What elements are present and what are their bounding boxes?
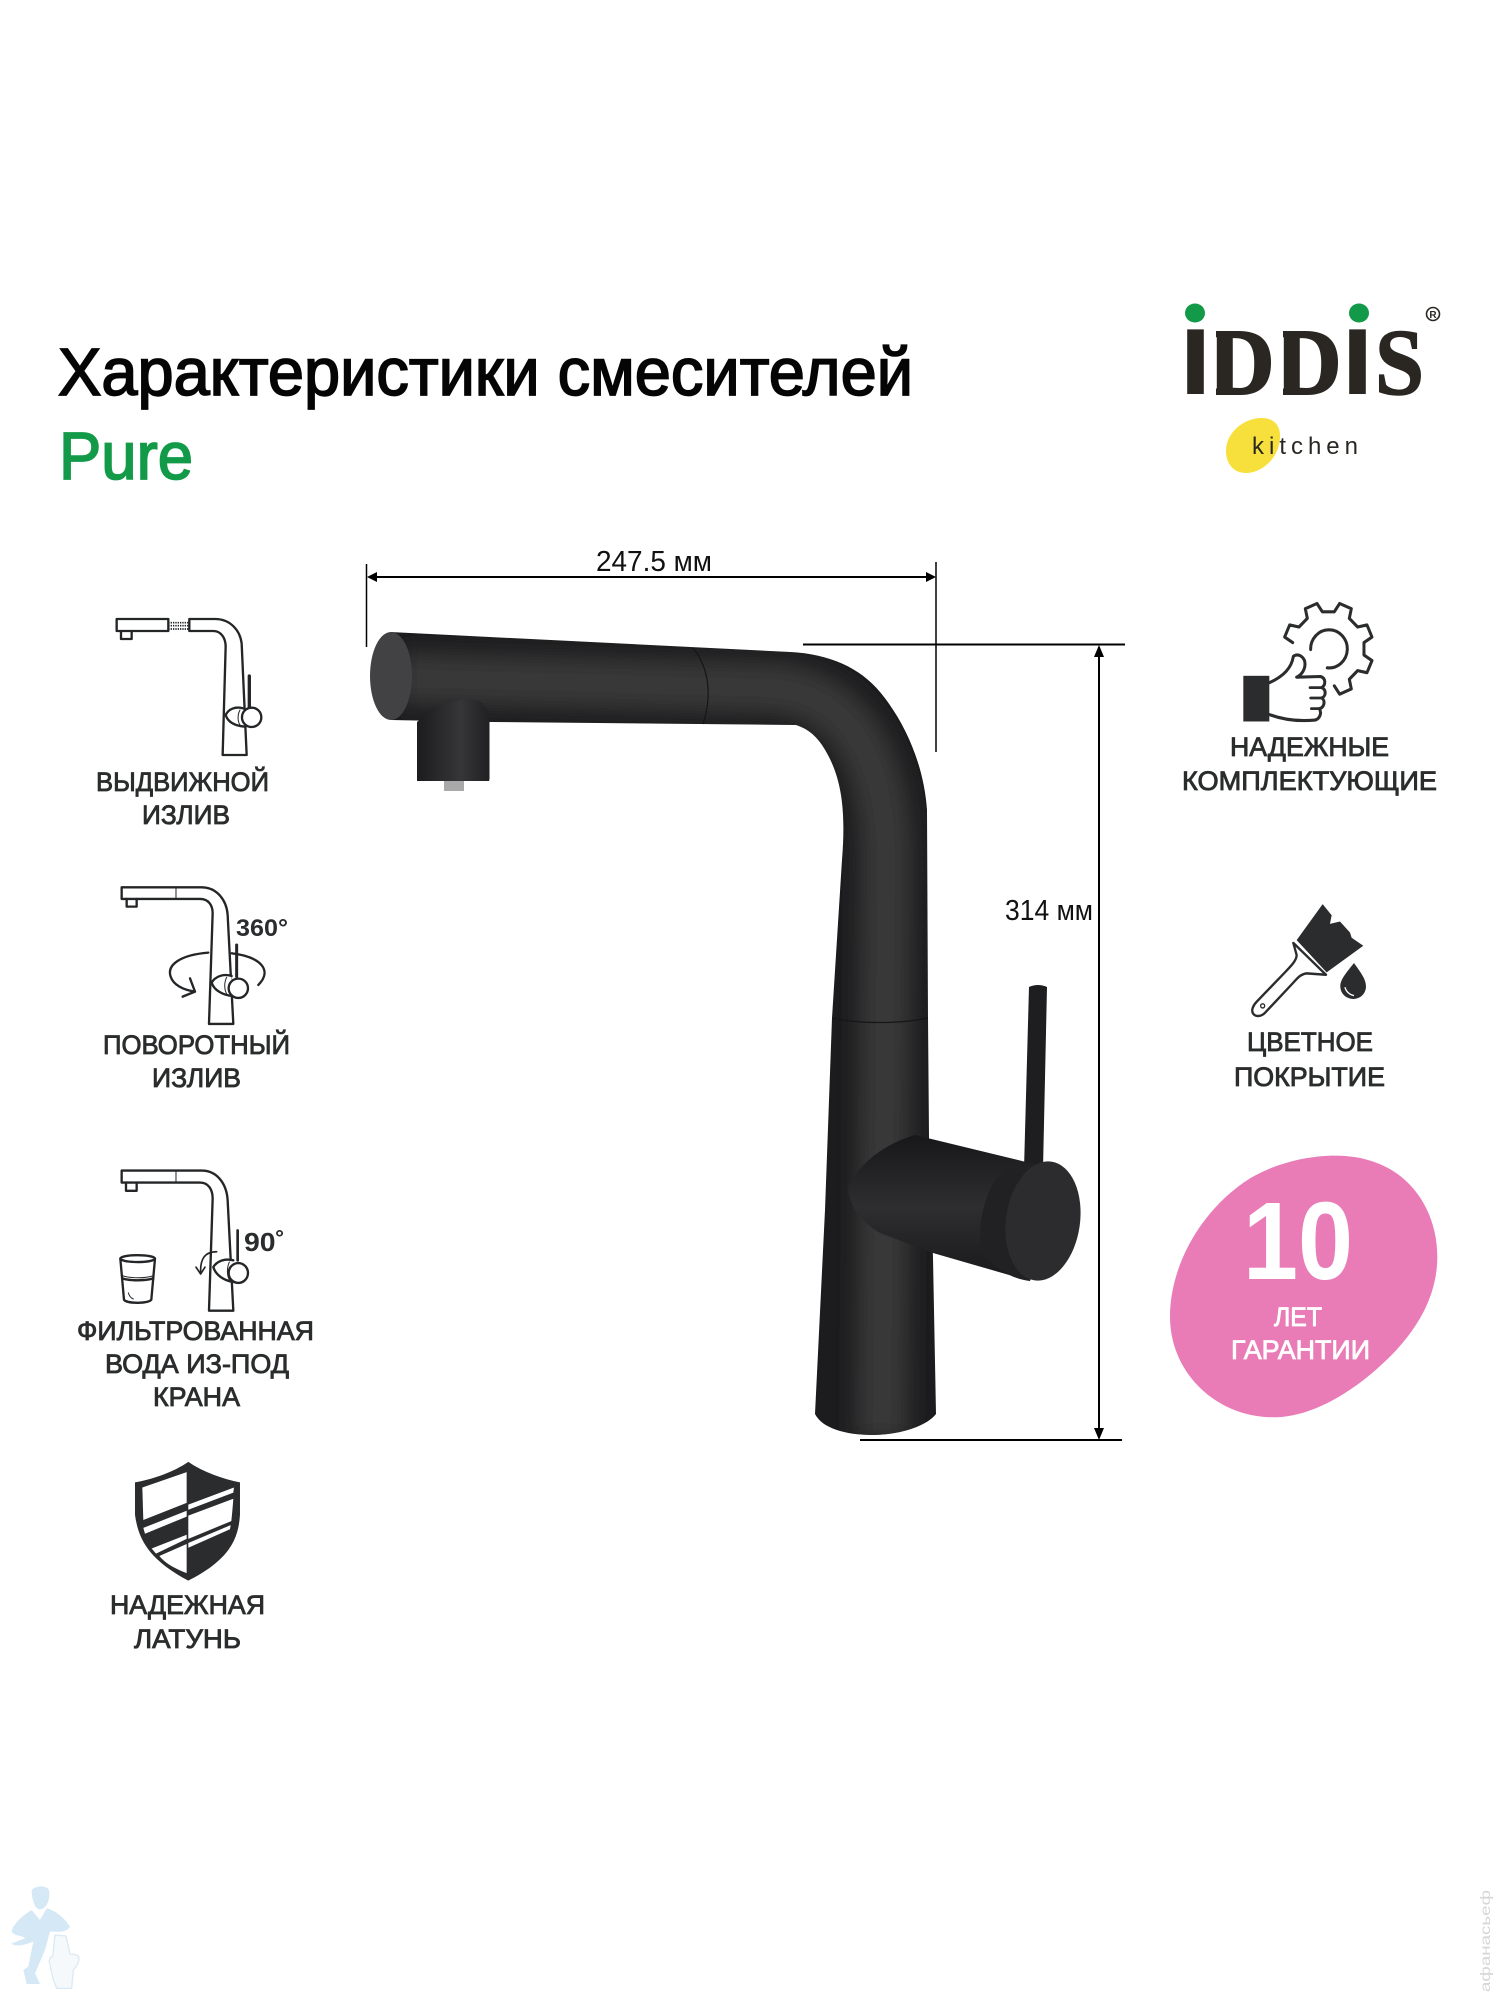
left feature: brass [110,1462,265,1654]
warranty label [1231,1302,1370,1365]
lever [1024,985,1047,1169]
spout seam [693,648,708,724]
label: КРАНА [153,1382,240,1412]
dimension lines [803,644,1125,1440]
left feature: pull-out spout [96,619,269,830]
handle ring [980,1160,1050,1281]
label: ЛАТУНЬ [134,1624,241,1654]
dimension lines [366,562,936,752]
aerator [417,699,490,791]
pink blob [1170,1156,1437,1417]
value: 247.5 мм [596,546,712,578]
logo wordmark: D [1276,311,1342,415]
kitchen wordmark: kitchen [1252,433,1358,460]
handle [848,985,1088,1286]
right feature: colored coating [1234,904,1385,1092]
arrowheads [367,572,936,582]
label [1234,1027,1385,1092]
warranty label: ГАРАНТИИ [1231,1335,1370,1365]
label: НАДЕЖНАЯ [110,1590,265,1620]
label [77,1316,314,1412]
label: КОМПЛЕКТУЮЩИЕ [1182,766,1437,796]
warranty badge [1170,1156,1437,1417]
glass [120,1255,155,1262]
label: ЦВЕТНОЕ [1247,1027,1373,1057]
logo wordmark [1180,309,1424,415]
label: ИЗЛИВ [142,800,230,830]
spout end face [370,632,412,720]
logo wordmark: S [1375,311,1424,415]
label: НАДЕЖНЫЕ [1230,732,1389,762]
left feature: filtered water [77,1171,314,1412]
arrowheads [1094,645,1104,1440]
label: 360 degrees: 360° [236,915,288,942]
number 10: 10 [1243,1180,1353,1303]
warranty label: ЛЕТ [1274,1302,1322,1332]
icon: thumb and gear [1243,603,1372,721]
label: ИЗЛИВ [152,1063,241,1093]
watermark: plumber [12,1886,79,1988]
label: ВОДА ИЗ-ПОД [105,1349,289,1379]
label: ПОВОРОТНЫЙ [103,1029,290,1060]
icon: faucet with 90 degree lever and glass [120,1171,248,1311]
label: 90 degrees: 90˚ [244,1227,285,1257]
dimension: height 314 mm [803,644,1125,1440]
icon: paint brush and drop [1252,904,1366,1016]
label [96,766,269,830]
logo wordmark: I [1180,309,1212,414]
icon: pull-out faucet [117,619,261,755]
faucet body and spout [380,620,950,1450]
subtitle: Pure: Pure [59,419,193,494]
title: Характеристики смесителей [58,335,913,410]
watermark: vertical site text: афанасьеф [1477,1890,1493,1992]
left feature: swivel spout [103,887,290,1093]
product: black faucet [370,620,1088,1450]
logo wordmark: D [1208,311,1274,415]
label: ФИЛЬТРОВАННАЯ [77,1316,314,1346]
logo wordmark: I [1342,309,1374,414]
handle disc [998,1156,1088,1286]
dimension: width 247.5 mm [366,546,936,752]
registered mark [1426,308,1440,321]
right feature: reliable components [1182,603,1437,796]
registered mark: R [1429,310,1437,321]
label: ПОКРЫТИЕ [1234,1062,1385,1092]
icon: swivel faucet 360 [122,887,265,1024]
logo: iddis kitchen [1180,304,1440,473]
label [1182,732,1437,796]
icon: shield [135,1462,240,1581]
label: ВЫДВИЖНОЙ [96,766,269,797]
label [103,1029,290,1093]
logo dots [1185,304,1369,322]
handle cylinder [848,1135,1045,1281]
body seam [832,1018,928,1022]
value: 314 мм [1005,895,1093,927]
label [110,1590,265,1654]
yellow blob [1226,418,1280,473]
